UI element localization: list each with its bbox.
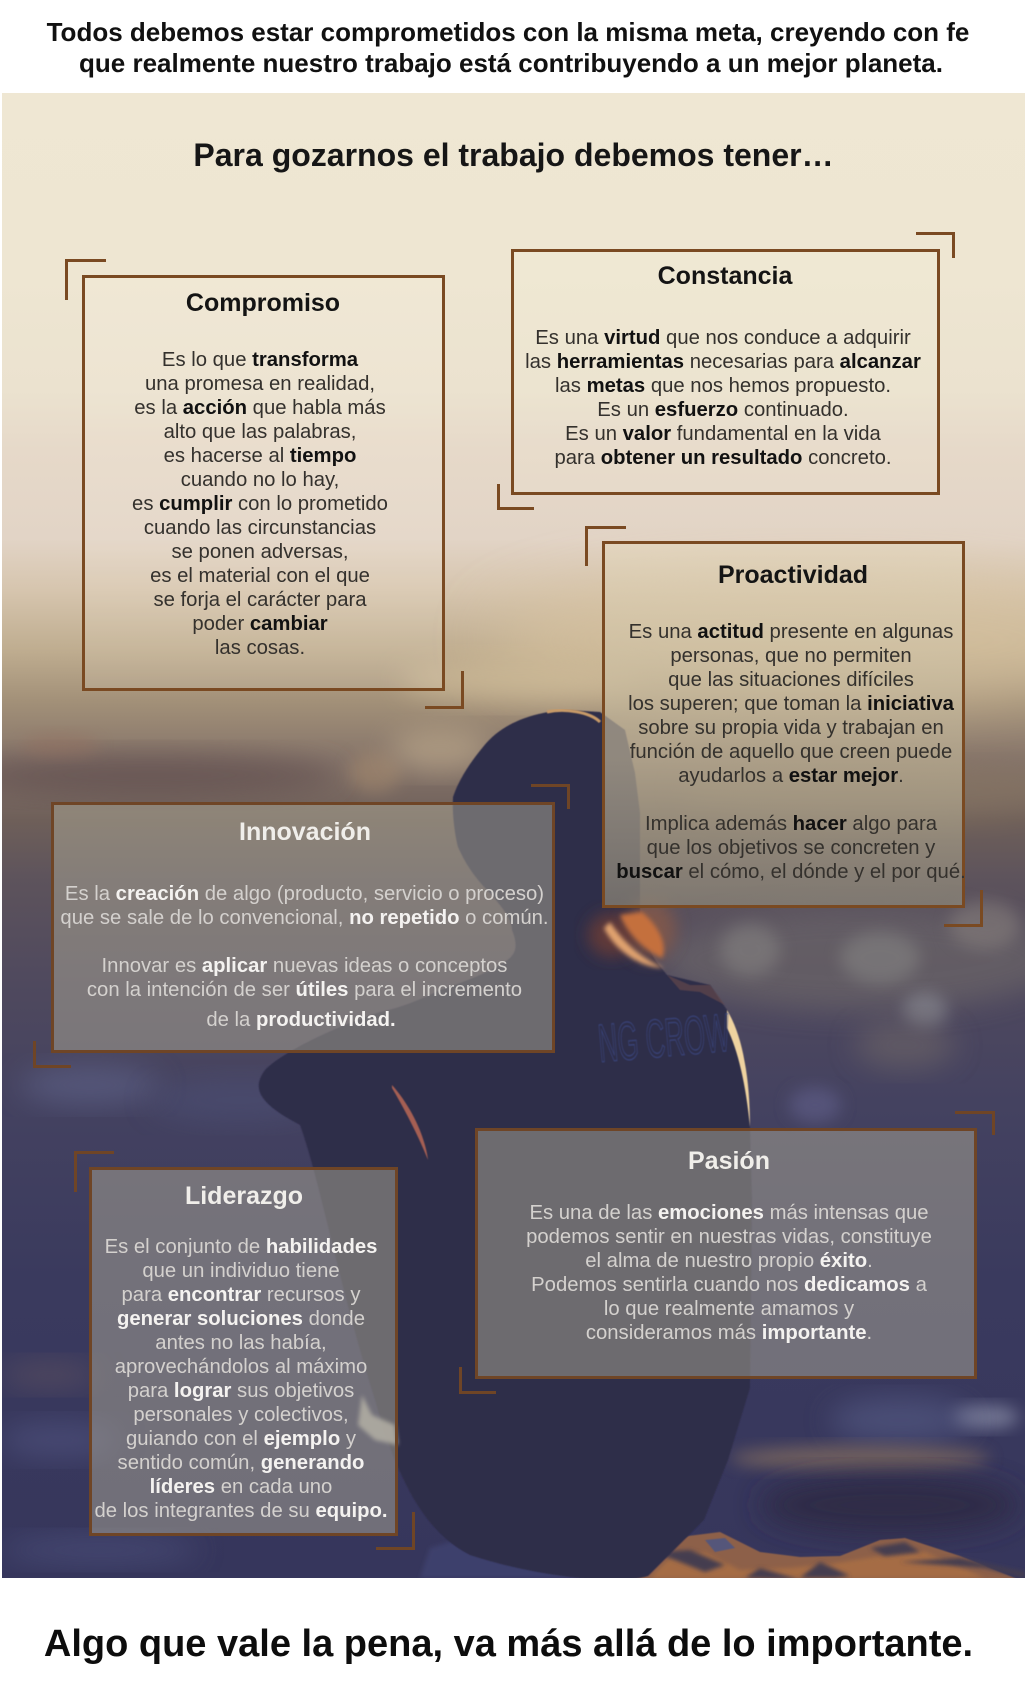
corner bracket xyxy=(425,671,464,709)
text block: que los objetivos se concreten y xyxy=(647,837,935,859)
panel frame xyxy=(89,1167,398,1536)
heading: Innovación xyxy=(239,818,371,846)
corner bracket xyxy=(376,1512,415,1550)
arm highlight xyxy=(392,1085,428,1160)
text block: Es un esfuerzo continuado. xyxy=(597,399,849,421)
heading: Compromiso xyxy=(186,289,340,317)
panel: Pasión xyxy=(459,1111,995,1394)
text block: para obtener un resultado concreto. xyxy=(554,447,892,469)
panel: Innovación xyxy=(33,784,570,1068)
corner bracket xyxy=(459,1367,496,1394)
text block: Podemos sentirla cuando nos dedicamos a xyxy=(531,1274,927,1296)
intro statement: Todos debemos estar comprometidos con la misma meta, creyendo con fe xyxy=(47,17,969,47)
text block: generar soluciones donde xyxy=(117,1308,365,1330)
text block: líderes en cada uno xyxy=(150,1476,332,1498)
text block: es cumplir con lo prometido xyxy=(132,493,388,515)
text block: que un individuo tiene xyxy=(142,1260,340,1282)
text block: Es una virtud que nos conduce a adquirir xyxy=(535,327,911,349)
hair rim light xyxy=(624,900,676,960)
text block: una promesa en realidad, xyxy=(145,373,375,395)
text block: para encontrar recursos y xyxy=(122,1284,360,1306)
hand highlight xyxy=(358,1395,398,1445)
text block: sobre su propia vida y trabajan en xyxy=(638,717,944,739)
text block: los superen; que toman la iniciativa xyxy=(628,693,954,715)
panel frame xyxy=(82,275,445,691)
text block: se ponen adversas, xyxy=(171,541,348,563)
panel frame xyxy=(51,802,555,1053)
text block: Implica además hacer algo para xyxy=(645,813,937,835)
text block: alto que las palabras, xyxy=(164,421,356,443)
text block: sentido común, generando xyxy=(118,1452,364,1474)
text block: es la acción que habla más xyxy=(134,397,386,419)
panel: Compromiso xyxy=(65,259,464,709)
text block xyxy=(526,1202,932,1344)
text block: consideramos más importante. xyxy=(586,1322,872,1344)
text block: Es lo que transforma xyxy=(162,348,358,370)
text block: Es una de las emociones más intensas que xyxy=(529,1202,929,1224)
text block xyxy=(60,882,549,1001)
panel frame xyxy=(511,249,940,495)
section heading: Para gozarnos el trabajo debemos tener… xyxy=(193,137,834,173)
text block: las herramientas necesarias para alcanzar xyxy=(525,351,921,373)
text block: se forja el carácter para xyxy=(153,589,367,611)
corner bracket xyxy=(65,259,106,300)
intro statement xyxy=(46,17,969,78)
corner bracket xyxy=(531,784,570,809)
corner bracket xyxy=(916,232,955,258)
text block: es hacerse al tiempo xyxy=(164,445,356,467)
text block: lo que realmente amamos y xyxy=(604,1298,854,1320)
text block xyxy=(616,621,966,883)
panel: Liderazgo xyxy=(74,1151,415,1550)
text block: Es un valor fundamental en la vida xyxy=(565,423,881,445)
text block: de la productividad. xyxy=(206,1008,396,1030)
corner bracket xyxy=(33,1041,71,1068)
intro statement: que realmente nuestro trabajo está contribuyendo a un mejor planeta. xyxy=(79,48,943,78)
text block: es el material con el que xyxy=(150,565,370,587)
corner bracket xyxy=(497,484,534,510)
text block xyxy=(132,348,388,659)
text block: Es una actitud presente en algunas xyxy=(629,621,953,643)
icon: person silhouette xyxy=(259,710,752,1580)
panel: Constancia xyxy=(497,232,955,510)
panel frame xyxy=(475,1128,977,1379)
closing statement: Algo que vale la pena, va más allá de lo importante. xyxy=(44,1623,973,1665)
heading: Pasión xyxy=(688,1147,770,1175)
corner bracket xyxy=(955,1111,995,1135)
text block: Es el conjunto de habilidades xyxy=(105,1236,377,1258)
shoulder rim light xyxy=(727,1010,750,1127)
text block: cuando las circunstancias xyxy=(144,517,376,539)
heading: Constancia xyxy=(658,262,792,290)
text block: cuando no lo hay, xyxy=(181,469,339,491)
shirt lettering: NG CROW xyxy=(596,1003,733,1074)
text block: con la intención de ser útiles para el incremento xyxy=(87,979,522,1001)
text block xyxy=(525,327,921,469)
text block: para lograr sus objetivos xyxy=(128,1380,354,1402)
text block: las metas que nos hemos propuesto. xyxy=(555,375,891,397)
heading: Proactividad xyxy=(718,561,868,589)
text block: las cosas. xyxy=(215,637,305,659)
panel frame xyxy=(602,541,965,908)
text block: antes no las había, xyxy=(155,1332,327,1354)
text block: que se sale de lo convencional, no repetido o común. xyxy=(60,907,549,929)
text block: de los integrantes de su equipo. xyxy=(94,1500,388,1522)
text block: aprovechándolos al máximo xyxy=(115,1356,367,1378)
text block: poder cambiar xyxy=(192,613,328,635)
text block: el alma de nuestro propio éxito. xyxy=(585,1250,873,1272)
corner bracket xyxy=(74,1151,114,1192)
text block: personales y colectivos, xyxy=(133,1404,349,1426)
corner bracket xyxy=(944,890,983,927)
blurred landscape tones xyxy=(0,570,1025,1564)
text block: guiando con el ejemplo y xyxy=(126,1428,356,1450)
text block: personas, que no permiten xyxy=(670,645,912,667)
heading: Liderazgo xyxy=(185,1182,303,1210)
text block: Es la creación de algo (producto, servicio o proceso) xyxy=(65,882,544,904)
text block: podemos sentir en nuestras vidas, constituye xyxy=(526,1226,932,1248)
corner bracket xyxy=(585,526,626,566)
text block: Innovar es aplicar nuevas ideas o conceptos xyxy=(102,955,507,977)
text block: ayudarlos a estar mejor. xyxy=(678,765,904,787)
icon: rock foreground xyxy=(420,1525,1025,1582)
text block: función de aquello que creen puede xyxy=(630,741,952,763)
text block: buscar el cómo, el dónde y el por qué. xyxy=(616,861,966,883)
panel: Proactividad xyxy=(585,526,983,927)
text block: que las situaciones difíciles xyxy=(668,669,914,691)
text block xyxy=(94,1236,388,1522)
